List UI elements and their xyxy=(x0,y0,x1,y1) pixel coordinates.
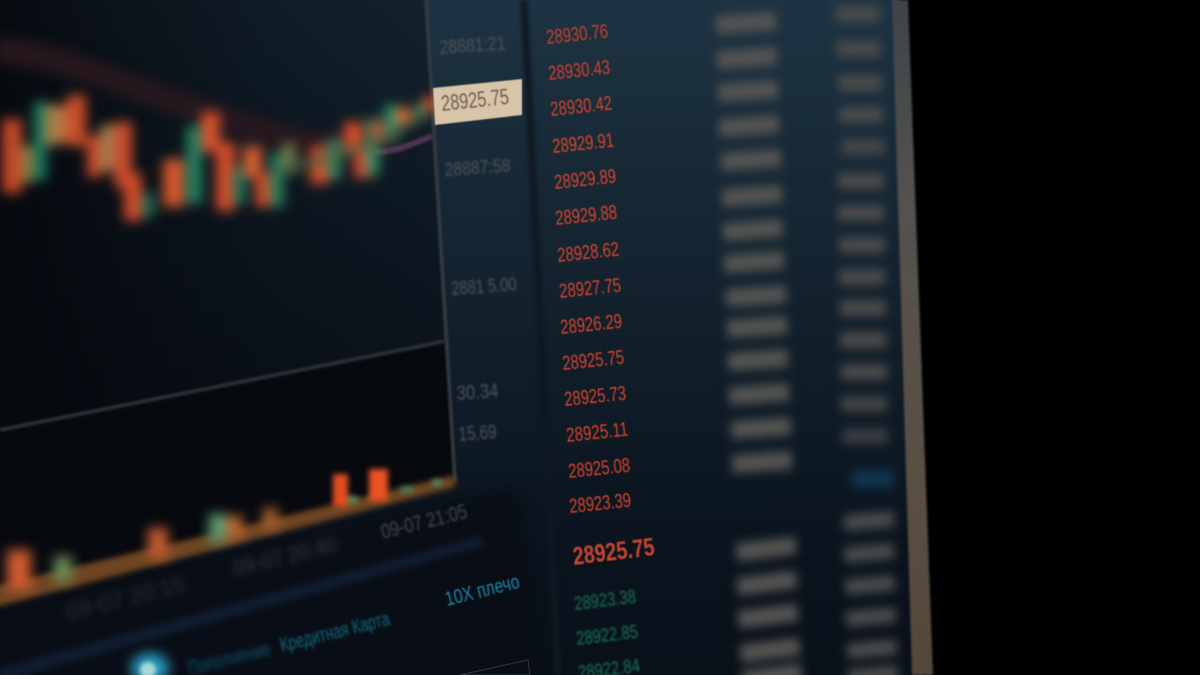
panel: screen background xyxy=(0,0,922,675)
green bid prices: 28922.85 xyxy=(575,622,639,650)
order book amounts column xyxy=(715,12,803,675)
price axis labels: 15.69 xyxy=(458,421,497,446)
red ask prices: 28926.29 xyxy=(559,311,623,339)
red ask prices: 28930.43 xyxy=(547,57,611,85)
red ask prices: 28929.89 xyxy=(553,166,617,194)
chart left shading xyxy=(0,0,445,428)
red ask prices: 28927.75 xyxy=(558,275,622,303)
last traded price: 28925.75 xyxy=(571,533,656,571)
footer links: Кредитная Карта xyxy=(278,608,392,657)
moving average lines xyxy=(0,50,432,152)
panel: lower dark footer xyxy=(0,490,550,675)
green bid prices xyxy=(573,587,641,675)
order book totals column xyxy=(836,6,899,675)
footer links xyxy=(131,571,522,675)
red ask prices: 28929.91 xyxy=(551,130,615,158)
price axis labels: 28887:58 xyxy=(444,155,511,180)
blue highlight cell xyxy=(852,470,894,488)
price axis labels xyxy=(439,33,517,446)
candlestick chart xyxy=(2,95,435,221)
red ask prices: 28929.88 xyxy=(554,202,618,230)
outlined button xyxy=(460,660,530,675)
time axis labels: 09-07 20:15 xyxy=(63,571,188,625)
red ask prices: 28930.42 xyxy=(549,93,613,121)
red ask prices: 28925.75 xyxy=(561,347,625,375)
green bid prices: 28923.38 xyxy=(573,587,637,615)
red ask prices xyxy=(545,21,632,518)
time axis labels: 09-07 21:05 xyxy=(379,500,470,544)
monitor bezel xyxy=(892,0,933,675)
red ask prices: 28928.62 xyxy=(556,239,620,267)
axis lines xyxy=(0,0,558,675)
price axis labels: 2881 5.00 xyxy=(451,275,517,300)
red ask prices: 28923.39 xyxy=(568,490,632,518)
volume bars xyxy=(0,469,455,607)
time axis labels: 09-07 20:40 xyxy=(231,533,339,581)
red ask prices: 28930.76 xyxy=(545,21,609,49)
red ask prices: 28925.08 xyxy=(567,455,631,483)
red ask prices: 28925.11 xyxy=(565,419,629,447)
footer band xyxy=(0,536,484,675)
footer links: 10X плечо xyxy=(443,571,522,611)
panel: volume chart area xyxy=(0,342,455,598)
current price tag: 28925.75 xyxy=(440,84,510,116)
current price tag xyxy=(433,79,522,125)
price axis labels: 30.34 xyxy=(456,380,499,405)
panel: price chart area xyxy=(0,0,445,428)
price axis labels: 28881:21 xyxy=(439,33,506,59)
red ask prices: 28925.73 xyxy=(563,383,627,411)
time axis labels xyxy=(63,500,470,625)
